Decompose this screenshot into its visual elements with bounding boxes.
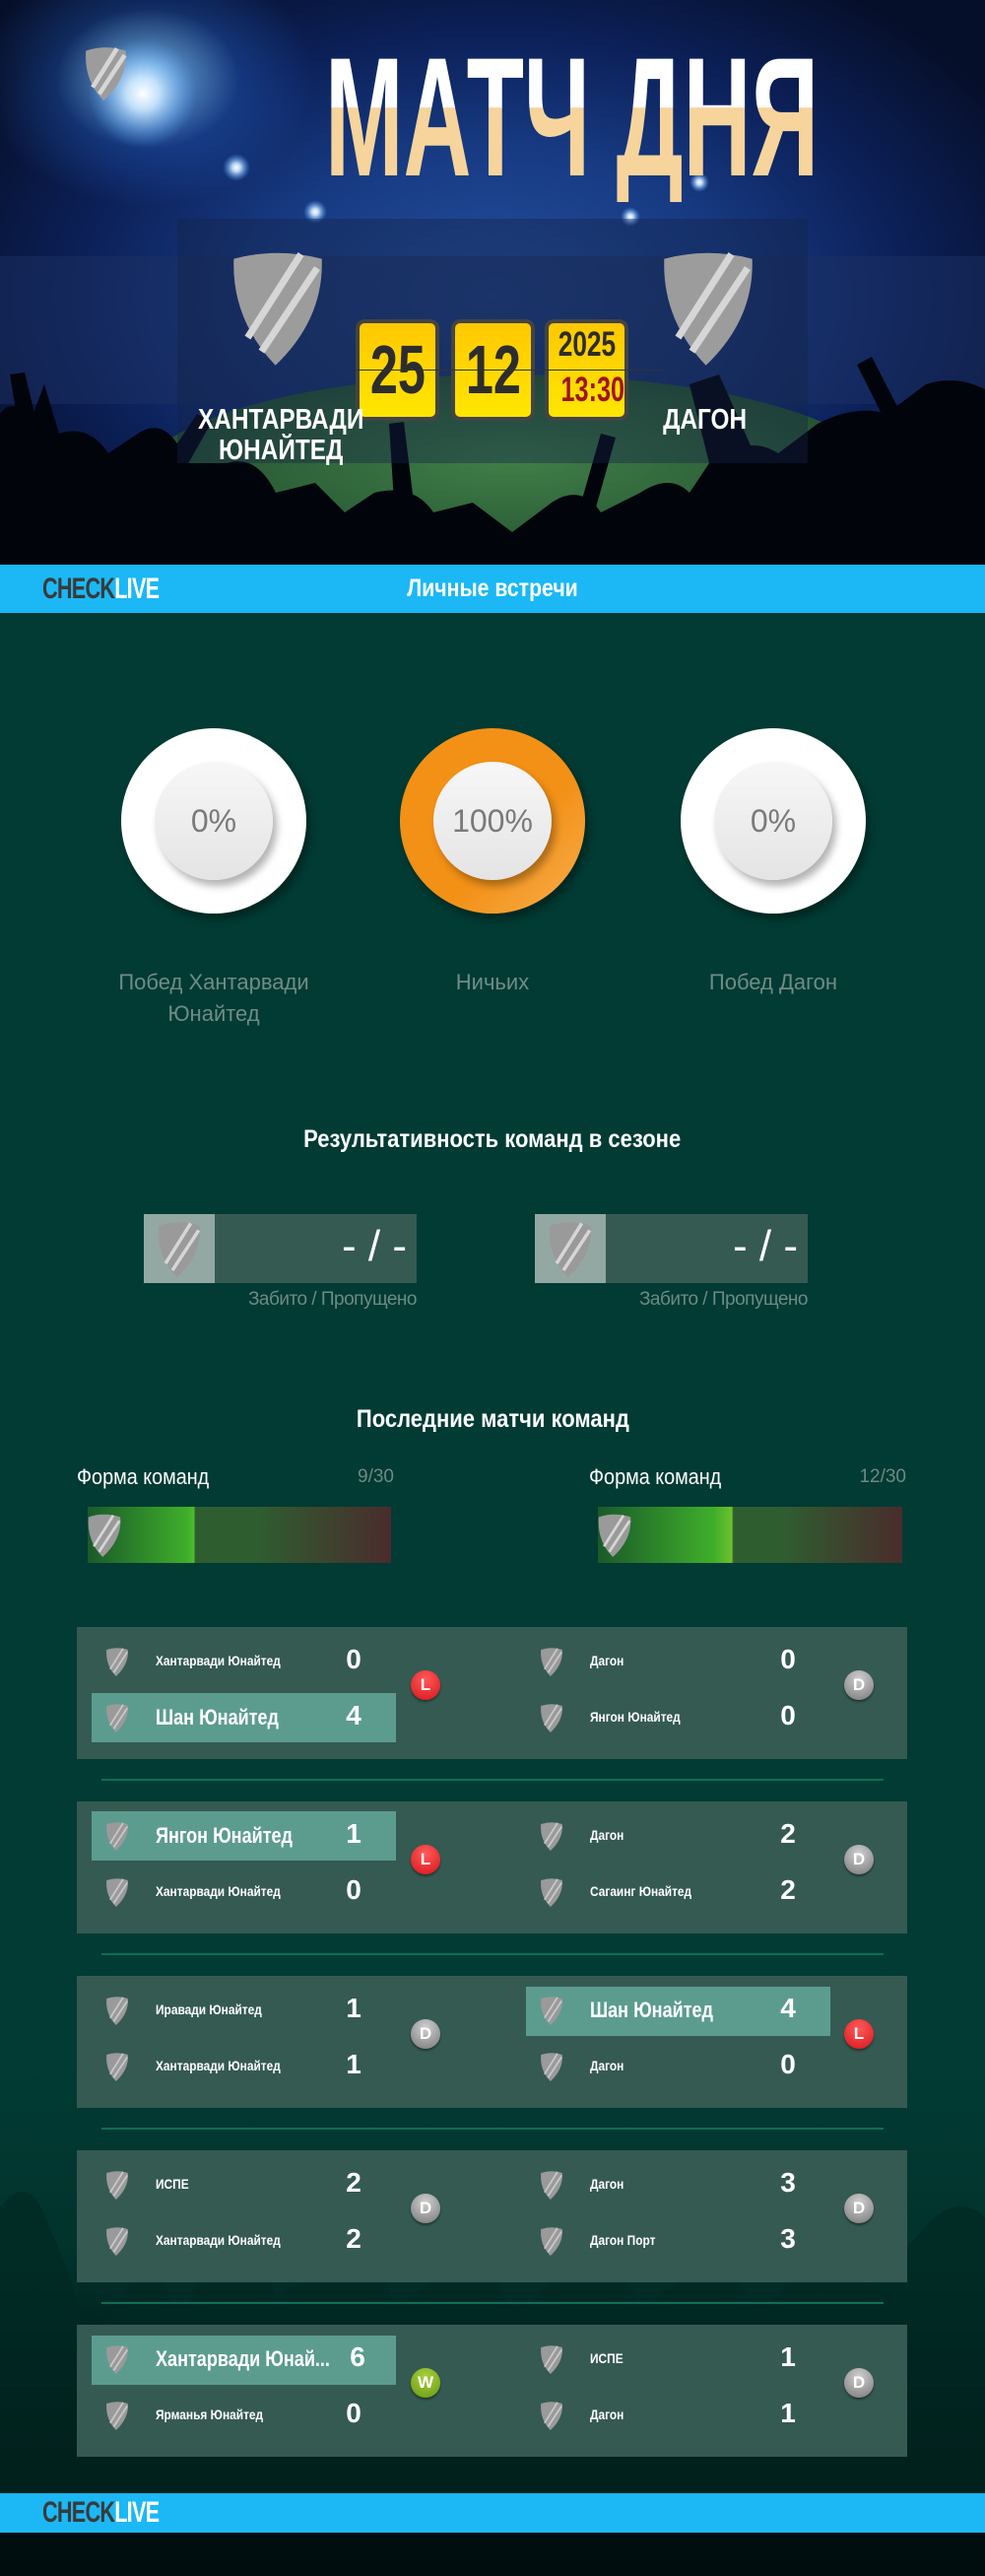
icon: small shield top-left (86, 47, 126, 101)
match block 2: Хантарвади Юнайтед (156, 1883, 281, 1899)
label: away wins: Побед Дагон (709, 970, 837, 994)
match block 3: Шан Юнайтед (590, 1998, 713, 2022)
circle: home wins: 0% (191, 803, 236, 839)
match block 4: D (853, 2199, 865, 2217)
tile: year and time: 13:30 (561, 371, 624, 409)
stat box: home: - / - (342, 1222, 407, 1270)
heading: recent matches: Последние матчи команд (356, 1405, 628, 1433)
match block 4: ИСПЕ (156, 2176, 189, 2192)
match block 5: Хантарвади Юнай... (156, 2346, 330, 2371)
stat box: away: - / - (733, 1222, 798, 1270)
match block 1: D (853, 1675, 865, 1694)
form: away: Форма команд (589, 1464, 721, 1489)
match block 1: Янгон Юнайтед (590, 1709, 681, 1725)
stat box: home (144, 1214, 417, 1283)
icon: away shield (664, 252, 753, 366)
circle: away wins (681, 728, 866, 914)
form: away: 12/30 (859, 1466, 906, 1487)
match block 2: Дагон (590, 1827, 624, 1843)
match block 5 (77, 2325, 907, 2457)
top bar (0, 565, 985, 613)
match block 5: 1 (780, 2398, 796, 2428)
match block 2: 2 (780, 1818, 796, 1849)
tile: month: 12 (466, 331, 521, 408)
tile: day: 25 (370, 331, 426, 408)
match block 5: Ярманья Юнайтед (156, 2407, 263, 2422)
heading: Личные встречи: Личные встречи (407, 575, 578, 602)
match block 4: 3 (780, 2223, 796, 2254)
match block 3 (77, 1976, 907, 2108)
match block 5: 0 (346, 2398, 361, 2428)
match block 5: 6 (350, 2341, 365, 2372)
match block 5: W (418, 2373, 433, 2392)
match block 3: Хантарвади Юнайтед (156, 2058, 281, 2073)
background crowd bottom (0, 2069, 985, 2576)
match block 1: 0 (346, 1644, 361, 1674)
title: МАТЧ ДНЯ (325, 23, 819, 212)
label: home wins: Юнайтед (167, 1001, 260, 1026)
match block 4: D (420, 2199, 431, 2217)
match block 1: Дагон (590, 1653, 624, 1668)
tile: day (356, 319, 439, 421)
match block 2: 2 (780, 1874, 796, 1905)
match block 4: Дагон (590, 2176, 624, 2192)
date tiles (356, 319, 663, 421)
match block 5: Дагон (590, 2407, 624, 2422)
match block 2: Янгон Юнайтед (156, 1823, 293, 1848)
match block 5: D (853, 2373, 865, 2392)
heading: season performance: Результативность команд в сезоне (303, 1125, 682, 1153)
match block 1 (77, 1627, 907, 1759)
crowd silhouette lower (0, 2192, 985, 2493)
tile: year and time (545, 319, 628, 421)
stat box: away (535, 1214, 808, 1283)
match block 2: L (421, 1850, 430, 1868)
form: home (77, 1464, 394, 1563)
match block 4: Хантарвади Юнайтед (156, 2232, 281, 2248)
match block 1: L (421, 1675, 430, 1694)
match block 1: Хантарвади Юнайтед (156, 1653, 281, 1668)
match block 1: 0 (780, 1644, 796, 1674)
circle: away wins: 0% (751, 803, 796, 839)
form: home: Форма команд (77, 1464, 209, 1489)
header: stadium banner (0, 0, 985, 565)
match block 3: L (854, 2024, 864, 2043)
stat label: away: Забито / Пропущено (639, 1289, 808, 1310)
match block 4: 2 (346, 2223, 361, 2254)
logo: CHECKLIVE (42, 573, 159, 605)
form: away (589, 1464, 906, 1563)
stat label: home: Забито / Пропущено (248, 1289, 417, 1310)
team name: home (198, 404, 363, 466)
match block 4: 3 (780, 2167, 796, 2198)
footer bar (0, 2493, 985, 2533)
match block 3: 1 (346, 2049, 361, 2079)
match block 1: Шан Юнайтед (156, 1705, 279, 1729)
tile: year and time: 2025 (558, 325, 616, 364)
match block 3: 4 (780, 1993, 796, 2023)
team name: away: ДАГОН (664, 404, 747, 436)
match block 4 (77, 2150, 907, 2282)
match block 3: Дагон (590, 2058, 624, 2073)
footer logo: CHECKLIVE (42, 2496, 159, 2529)
match block 4: Дагон Порт (590, 2232, 655, 2248)
match block 5: 1 (780, 2341, 796, 2372)
match block 1: 0 (780, 1700, 796, 1730)
match block 3: Иравади Юнайтед (156, 2001, 262, 2017)
match block 3: 0 (780, 2049, 796, 2079)
match block 3: 1 (346, 1993, 361, 2023)
team name: home: ЮНАЙТЕД (219, 435, 343, 466)
circle: home wins (121, 728, 306, 914)
match block 2: 0 (346, 1874, 361, 1905)
match block 3: D (420, 2024, 431, 2043)
label: home wins: Побед Хантарвади (118, 970, 309, 994)
circle: draws: 100% (452, 803, 533, 839)
team name: home: ХАНТАРВАДИ (198, 404, 363, 436)
label: home wins (118, 970, 309, 1026)
form bar (88, 1507, 391, 1563)
match block 1: 4 (346, 1700, 361, 1730)
match block 2 (77, 1801, 907, 1933)
match block 2: Сагаинг Юнайтед (590, 1883, 691, 1899)
match block 2: D (853, 1850, 865, 1868)
match block 2: 1 (346, 1818, 361, 1849)
panel: match overlay (177, 219, 808, 463)
panel: head-to-head circles (121, 728, 871, 920)
label: draws: Ничьих (456, 970, 529, 994)
crowd silhouettes (0, 380, 985, 565)
tile: month (451, 319, 535, 421)
circle: draws (400, 728, 585, 914)
form bar (598, 1507, 902, 1563)
match block 4: 2 (346, 2167, 361, 2198)
match block 5: ИСПЕ (590, 2350, 624, 2366)
form: home: 9/30 (358, 1466, 394, 1487)
icon: home shield (233, 252, 322, 366)
